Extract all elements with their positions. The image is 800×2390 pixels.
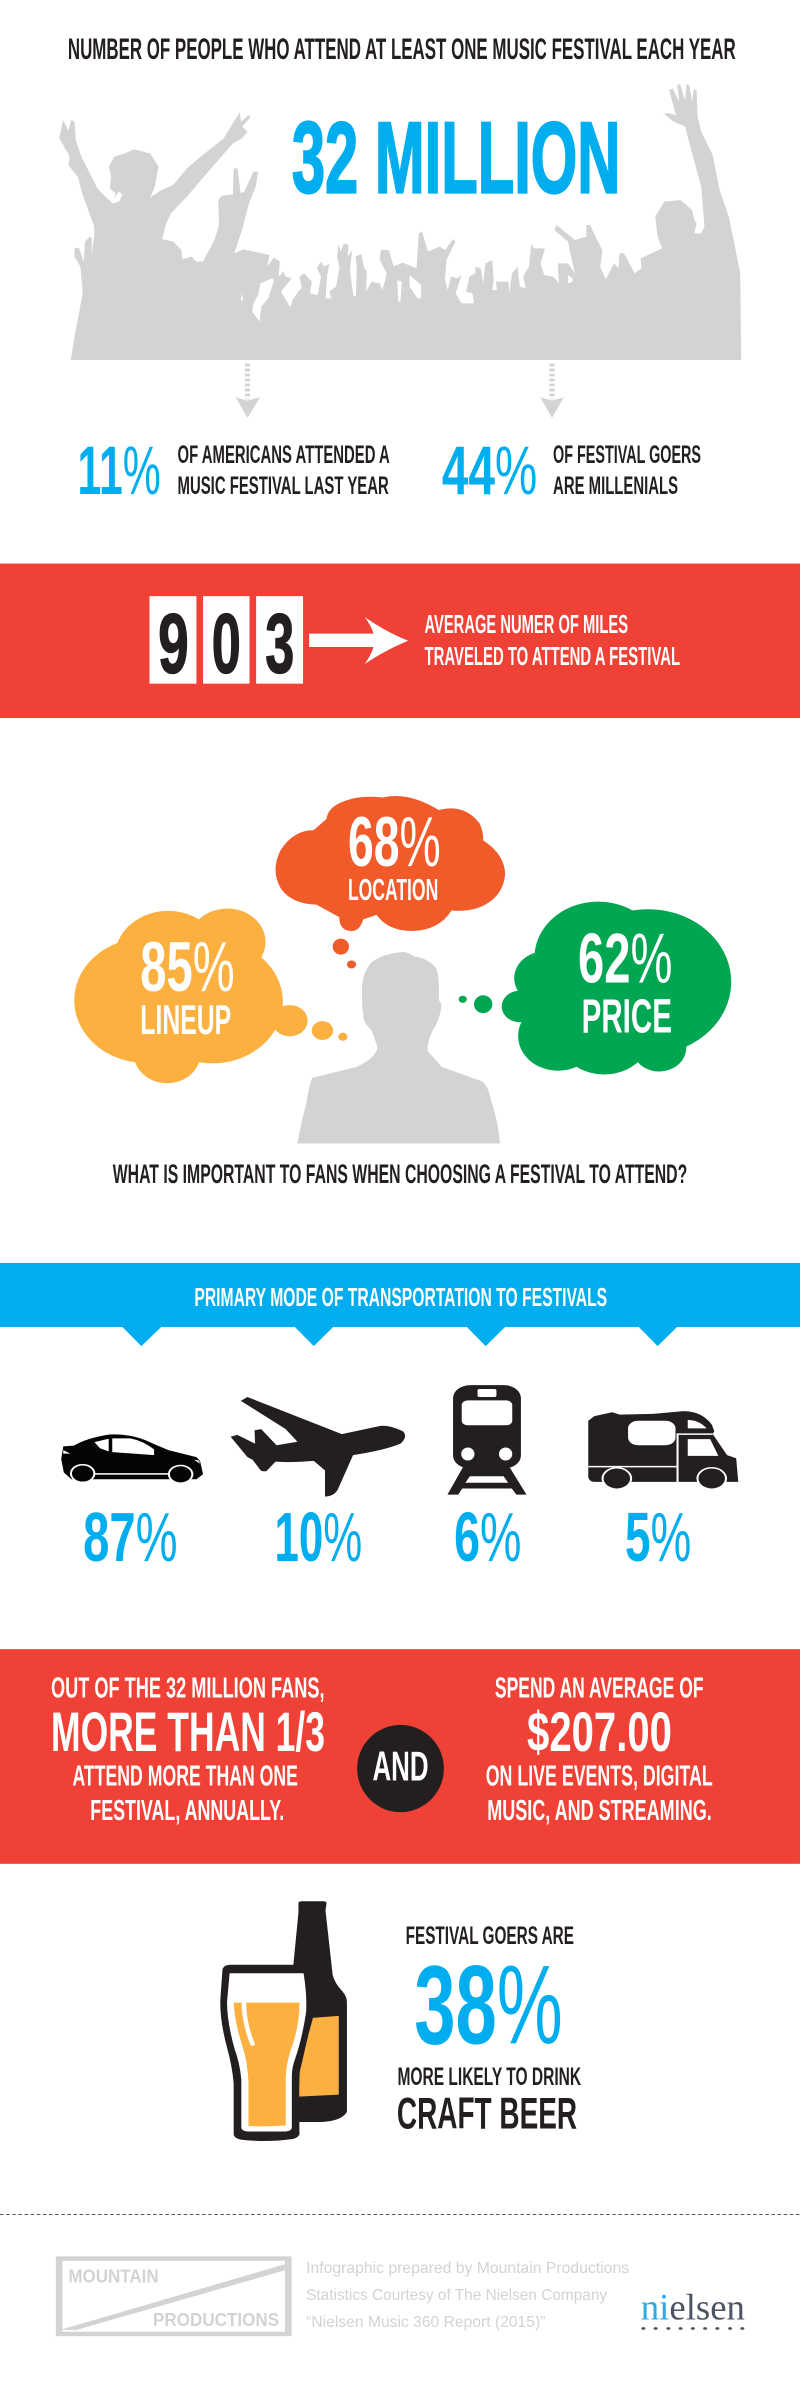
panel: fans and spending: OUT OF THE 32 MILLION FANS, <box>51 1673 324 1704</box>
section: transportation <box>0 1263 800 1576</box>
thought cloud: lineup <box>74 908 347 1083</box>
person silhouette <box>297 952 500 1143</box>
credits text: Infographic prepared by Mountain Productions <box>306 2260 629 2277</box>
badge: and <box>357 1725 444 1812</box>
section: what is important to fans <box>74 796 731 1190</box>
stat: 11 percent <box>78 432 390 509</box>
logo: nielsen: nielsen <box>641 2288 745 2328</box>
thought cloud: location <box>276 796 505 968</box>
odometer: 903 <box>149 596 303 691</box>
crowd silhouette <box>59 84 741 360</box>
icon: beer bottle and glass <box>220 1901 347 2141</box>
credits text: “Nielsen Music 360 Report (2015)” <box>306 2314 545 2331</box>
section: crowd headline: OF AMERICANS ATTENDED A <box>178 440 390 469</box>
arrow: right <box>309 617 408 664</box>
text block: more than one third: FESTIVAL, ANNUALLY. <box>90 1796 284 1827</box>
section: craft beer <box>0 1901 800 2334</box>
text block: average spend: $207.00 <box>527 1701 672 1763</box>
thought cloud: lineup: 85% <box>140 928 235 1007</box>
thought cloud: price <box>459 902 731 1074</box>
text block: more than one third <box>51 1673 325 1827</box>
banner: primary mode of transportation <box>0 1263 800 1346</box>
badge: and: AND <box>372 1744 429 1790</box>
panel: fans and spending: MORE THAN 1/3 <box>51 1701 325 1763</box>
stat: train 6 percent: 6% <box>454 1499 521 1576</box>
text block: more than one third: ATTEND MORE THAN ONE <box>72 1761 298 1792</box>
logo: mountain productions <box>59 2259 288 2334</box>
odometer: 903: 9 <box>158 597 189 691</box>
credits text <box>306 2260 629 2331</box>
stat: 44 percent: 44% <box>442 432 537 509</box>
stat: 38 percent: 38% <box>414 1943 563 2068</box>
icon: train <box>447 1385 527 1495</box>
panel: miles traveled <box>0 564 800 718</box>
icon: car <box>61 1434 203 1484</box>
section: crowd headline: MUSIC FESTIVAL LAST YEAR <box>178 471 389 500</box>
stat: 11 percent: 11% <box>78 432 161 509</box>
icon: rv camper <box>588 1411 738 1490</box>
odometer: 903: 3 <box>265 597 294 691</box>
section: crowd headline <box>59 32 741 509</box>
thought cloud: lineup: LINEUP <box>140 996 231 1043</box>
thought cloud: price: 62% <box>578 919 672 998</box>
arrow: down right <box>540 364 564 418</box>
stat: 44 percent <box>442 432 701 509</box>
credits text: Statistics Courtesy of The Nielsen Company <box>306 2287 607 2304</box>
logo: mountain productions: MOUNTAIN <box>68 2266 159 2286</box>
panel: fans and spending <box>0 1649 800 1864</box>
stat: rv 5 percent: 5% <box>625 1499 691 1576</box>
odometer: 903: 0 <box>212 597 241 691</box>
stat: car 87 percent: 87% <box>83 1499 178 1576</box>
thought cloud: location: 68% <box>348 803 441 882</box>
thought cloud: price: PRICE <box>582 989 672 1043</box>
stat: plane 10 percent: 10% <box>274 1499 362 1576</box>
arrow: down left <box>236 364 260 418</box>
thought cloud: location: LOCATION <box>348 872 438 907</box>
text block: average spend <box>486 1673 713 1827</box>
logo: mountain productions: PRODUCTIONS <box>153 2309 279 2330</box>
text: average miles <box>424 609 680 670</box>
icon: plane <box>231 1397 405 1496</box>
